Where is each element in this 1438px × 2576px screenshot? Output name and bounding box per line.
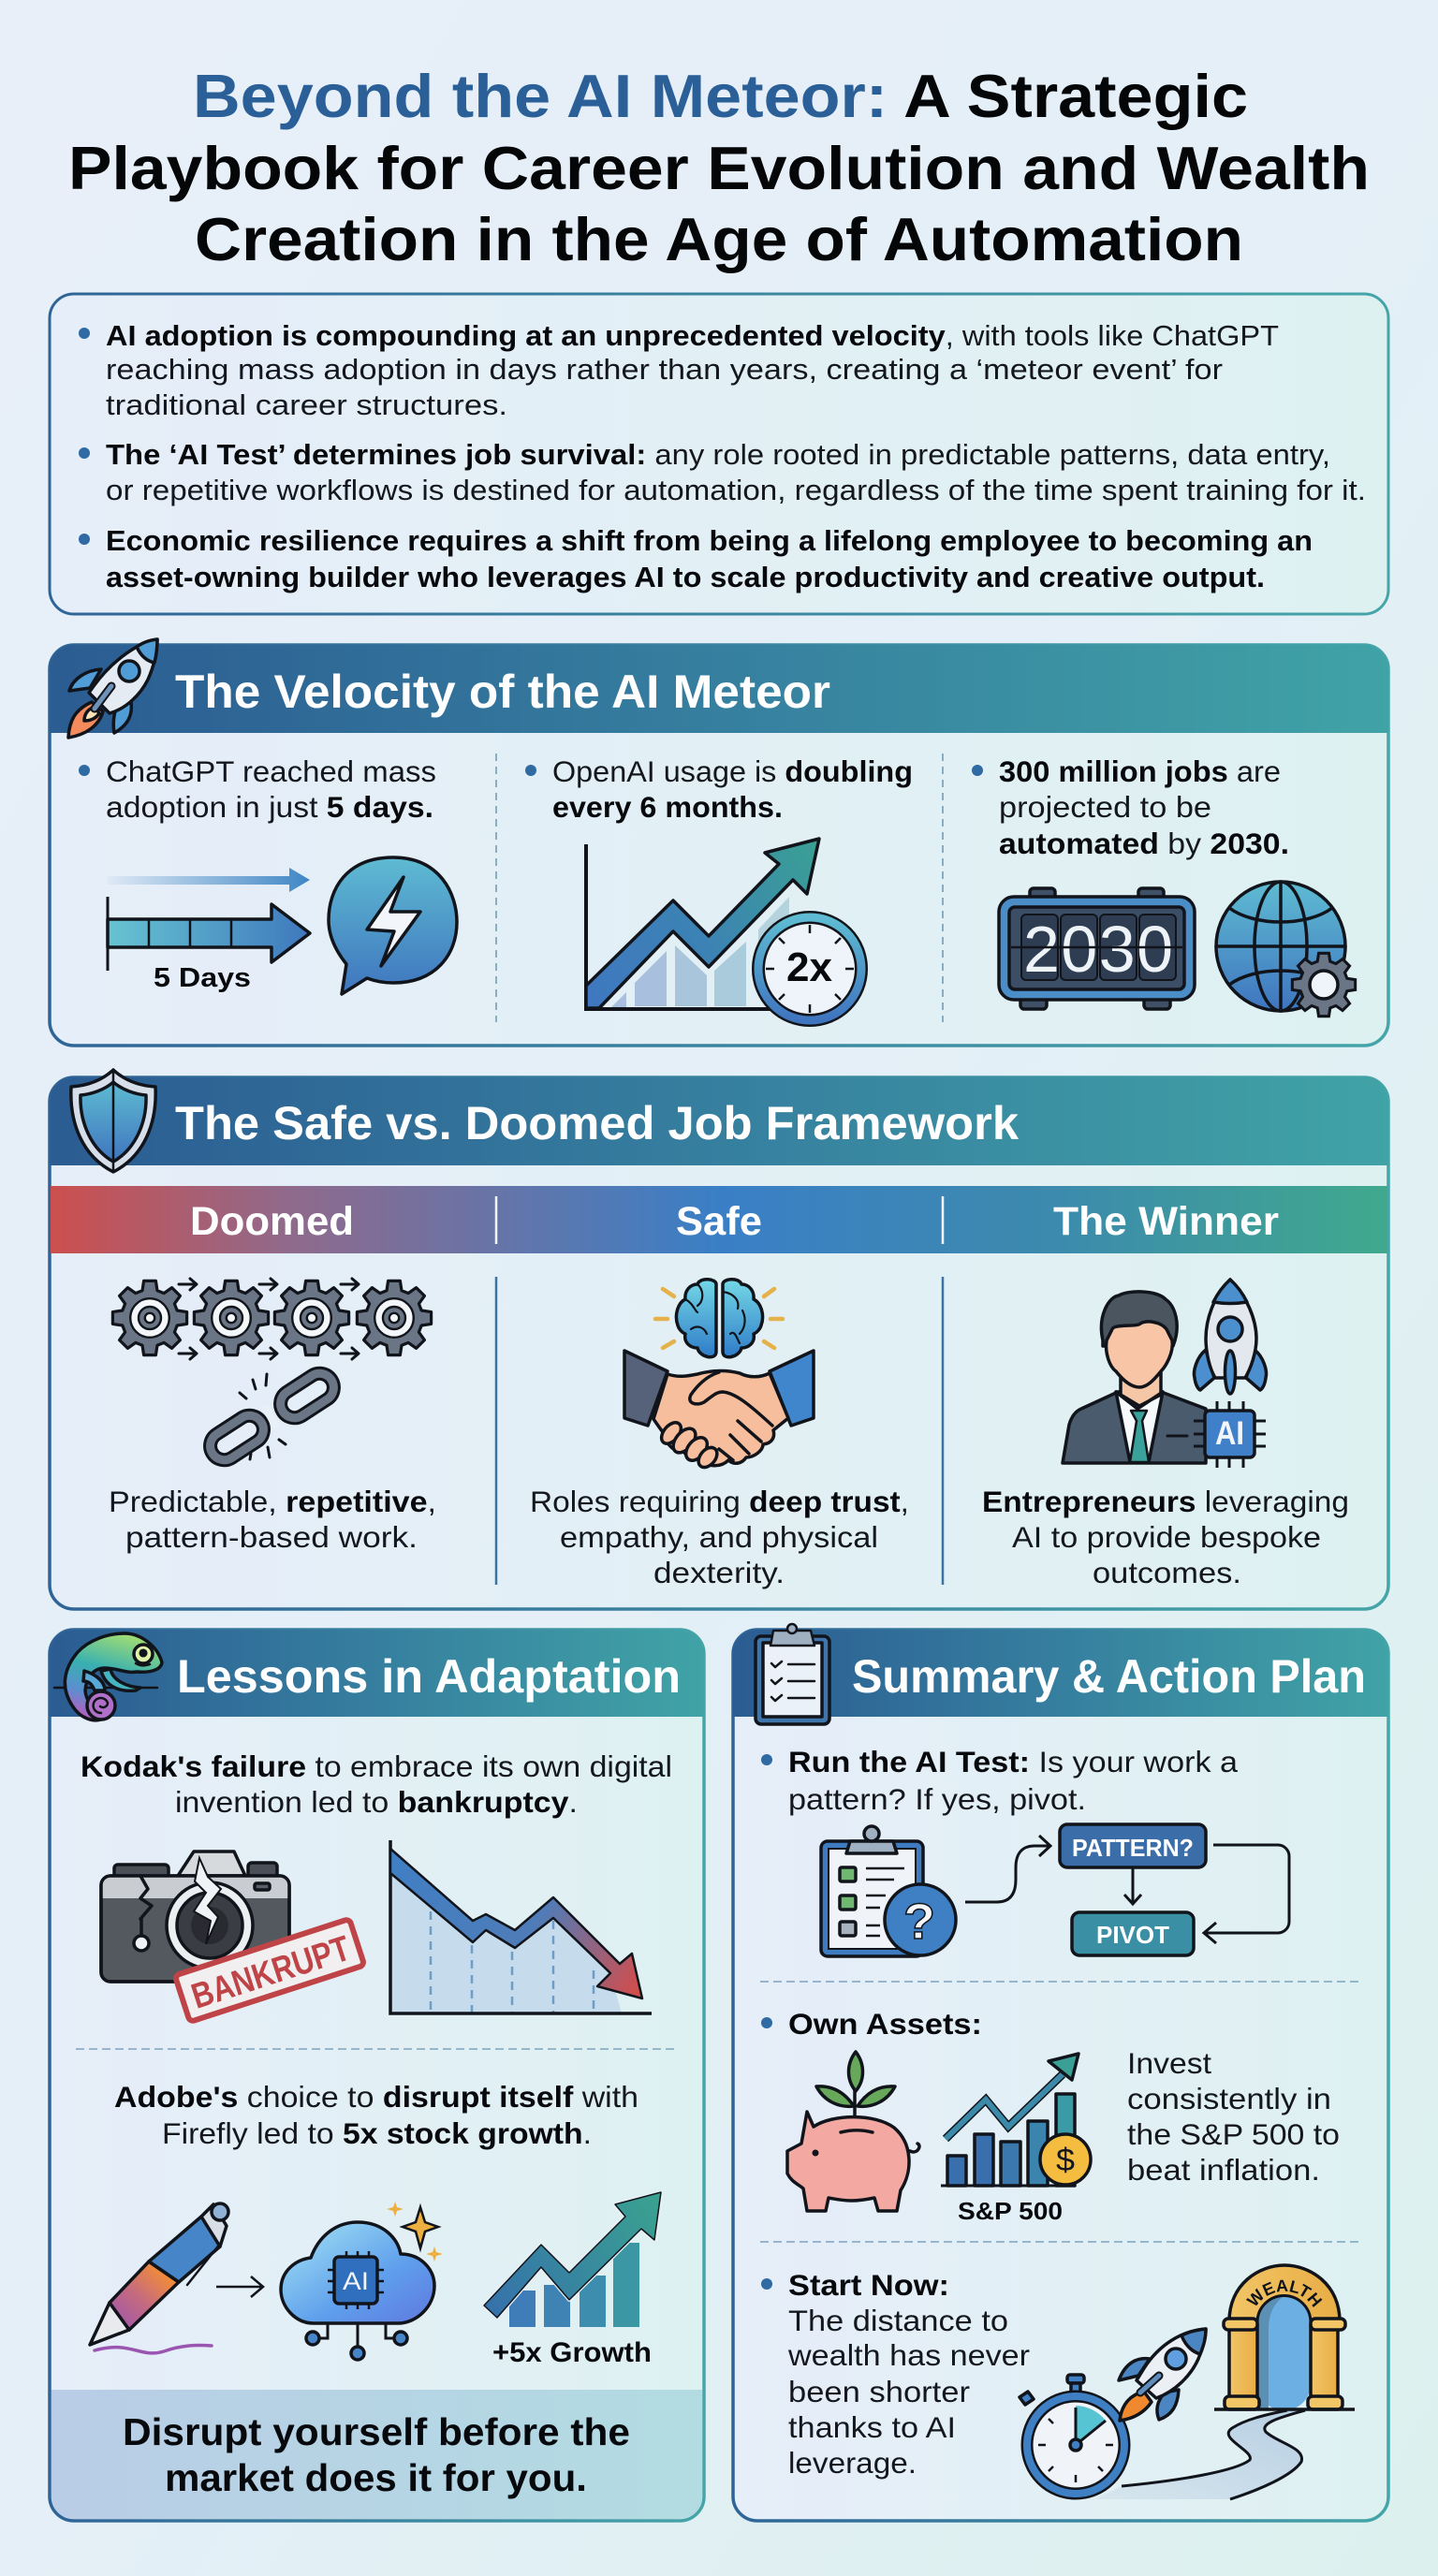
- column: safe: empathy, and physical: [560, 1520, 878, 1554]
- arrow: pattern loop to pivot: [1204, 1845, 1289, 1943]
- step: start now: thanks to AI: [788, 2410, 956, 2444]
- section header: [50, 1077, 1388, 1165]
- text: beat inflation.: [1127, 2153, 1320, 2187]
- heading: The Safe vs. Doomed Job Framework: [175, 1097, 1019, 1149]
- title: Playbook for Career Evolution and Wealth: [68, 134, 1370, 202]
- band: column headers: Safe: [676, 1199, 762, 1244]
- heading: The Velocity of the AI Meteor: [175, 666, 830, 718]
- step: run the AI test: [761, 1745, 1289, 1956]
- text: Predictable, repetitive ,: [109, 1485, 436, 1518]
- icon: broken camera: [101, 1852, 289, 1982]
- box: pattern: PATTERN?: [1072, 1834, 1194, 1862]
- icon: checklist with question: ?: [903, 1894, 935, 1950]
- chart: growth: [484, 2192, 661, 2327]
- column: 300 million jobs: 300 million jobs are: [999, 754, 1281, 788]
- case: Kodak: invention led to bankruptcy .: [175, 1785, 578, 1819]
- icon: AI cloud: [281, 2202, 443, 2360]
- step: start now: wealth has never: [787, 2338, 1030, 2372]
- section header: [50, 1630, 704, 1717]
- icon: stopwatch: [1020, 2375, 1124, 2494]
- icon: entrepreneur: [1063, 1292, 1206, 1463]
- box: pattern: [1060, 1824, 1206, 1867]
- title: Creation in the Age of Automation: [195, 205, 1243, 273]
- text: Roles requiring deep trust ,: [530, 1485, 909, 1518]
- bullet: AI adoption: [79, 319, 1279, 421]
- text: Invest: [1127, 2046, 1211, 2080]
- section header: [733, 1630, 1388, 1717]
- bullet: AI Test: The ‘AI Test’ determines job survival: any role rooted in predictable patterns, data entry,: [106, 438, 1330, 471]
- chart: S&P 500: $: [1056, 2143, 1075, 2178]
- icon: wealth arch: WEALTH: [1245, 2280, 1322, 2307]
- icon: pen: [90, 2203, 228, 2353]
- icon: AI chip: [1194, 1401, 1266, 1468]
- box: pivot: [1072, 1912, 1194, 1955]
- divider: [760, 1981, 1361, 1983]
- text: [1127, 2046, 1340, 2187]
- bullet: AI adoption: traditional career structures.: [106, 388, 507, 421]
- bullet: AI Test: [79, 438, 1366, 506]
- bullet: economic resilience: Economic resilience requires a shift from being a lifelong employee to becoming an: [106, 524, 1313, 557]
- column: doubling: OpenAI usage is doubling: [552, 754, 913, 788]
- column: 5 days: ChatGPT reached mass: [106, 754, 436, 788]
- step: own assets: [761, 2007, 1340, 2225]
- icon: clipboard checklist: [756, 1624, 829, 1724]
- callout: disrupt yourself: Disrupt yourself before the: [123, 2410, 630, 2453]
- icon: flip clock 2030: [999, 888, 1195, 1009]
- title: [68, 62, 1370, 273]
- icon: rocket: [1195, 1280, 1266, 1394]
- column: doomed: pattern-based work.: [125, 1520, 418, 1554]
- chart: falling line: [390, 1840, 652, 2013]
- column: 300 million jobs: projected to be: [999, 790, 1211, 824]
- text: consistently in: [1127, 2082, 1331, 2115]
- label: S&P 500: S&P 500: [958, 2197, 1063, 2225]
- step: start now: been shorter: [788, 2375, 970, 2408]
- column dividers: [496, 1277, 943, 1585]
- arrow: down to pivot: [1124, 1867, 1141, 1904]
- icon: doubling chart with clock: [586, 839, 861, 1020]
- stamp: bankrupt: BANKRUPT: [187, 1929, 355, 2017]
- panel: key takeaways: [50, 294, 1388, 614]
- column: 300 million jobs: automated by 2030.: [999, 827, 1289, 860]
- label: +5x growth: +5x Growth: [492, 2337, 652, 2368]
- step: run the AI test: pattern? If yes, pivot.: [788, 1782, 1086, 1816]
- box: pivot: PIVOT: [1096, 1921, 1169, 1949]
- icon: AI chip: AI: [1215, 1415, 1244, 1452]
- icon: gears chain: [112, 1279, 432, 1359]
- text: Entrepreneurs leveraging: [982, 1485, 1349, 1518]
- band: column headers: The Winner: [1053, 1199, 1279, 1244]
- panel: lessons in adaptation: [50, 1630, 704, 2521]
- icon: broken chain link: [205, 1368, 339, 1465]
- icon: lightning chat bubble: [329, 857, 457, 994]
- panel: summary and action plan: [731, 1623, 1390, 2523]
- column: the winner: outcomes.: [1093, 1556, 1241, 1589]
- callout: disrupt yourself: market does it for you.: [165, 2456, 587, 2499]
- bullet: economic resilience: [79, 524, 1313, 593]
- arrow: to pattern: [965, 1836, 1050, 1902]
- bullet: AI Test: or repetitive workflows is destined for automation, regardless of the time spent training for it.: [106, 474, 1366, 506]
- bullet: AI adoption: reaching mass adoption in days rather than years, creating a ‘meteor event’ for: [106, 353, 1223, 386]
- band: column headers: Doomed: [190, 1199, 354, 1244]
- icon: shield: [71, 1070, 155, 1172]
- icon: winding road: [1095, 2410, 1305, 2499]
- chart: S&P 500: [941, 2054, 1091, 2186]
- icon: globe with gear: [1216, 882, 1356, 1017]
- column: safe: dexterity.: [653, 1556, 785, 1589]
- column: 5 days: adoption in just 5 days.: [106, 790, 433, 824]
- column: the winner: [982, 1280, 1349, 1589]
- icon: rocket: [68, 639, 157, 738]
- text: the S&P 500 to: [1127, 2117, 1340, 2151]
- case: Kodak: [81, 1749, 672, 2022]
- icon: piggy bank with sprout: [787, 2052, 919, 2211]
- icon: flip clock 2030: 2030: [1023, 913, 1173, 986]
- icon: AI cloud: AI: [343, 2267, 369, 2295]
- icon: doubling chart with clock: 2x: [786, 944, 833, 990]
- column: 5 days: [79, 754, 457, 994]
- bullet: AI adoption: AI adoption is compounding at an unprecedented velocity , with tools like ChatGPT: [106, 319, 1279, 352]
- band: column headers: [51, 1186, 1387, 1253]
- icon: chameleon: [54, 1633, 162, 1720]
- column: doomed: [109, 1279, 436, 1554]
- icon: checklist with question: [821, 1826, 956, 1956]
- icon: brain: [655, 1280, 783, 1357]
- title: Beyond the AI Meteor: A Strategic: [193, 62, 1248, 130]
- step: start now: Start Now:: [788, 2268, 949, 2302]
- icon: handshake: [624, 1351, 814, 1471]
- icon: wealth arch: [1214, 2263, 1355, 2411]
- heading: Lessons in Adaptation: [177, 1650, 681, 1703]
- bullet: economic resilience: asset-owning builder who leverages AI to scale productivity and creative output.: [106, 561, 1265, 593]
- road edges: [1122, 2410, 1305, 2499]
- icon: rocket: [1119, 2329, 1206, 2421]
- step: run the AI test: Run the AI Test: Is your work a: [788, 1745, 1239, 1778]
- case: Adobe: Firefly led to 5x stock growth .: [162, 2116, 592, 2150]
- column: doubling: every 6 months.: [552, 790, 783, 824]
- column: doubling: [525, 754, 913, 1020]
- column: 300 million jobs: [972, 754, 1356, 1017]
- section header: [50, 645, 1388, 733]
- heading: Summary & Action Plan: [852, 1650, 1366, 1703]
- step: start now: leverage.: [788, 2446, 917, 2480]
- callout: disrupt yourself: [51, 2390, 702, 2519]
- column dividers: [496, 754, 943, 1022]
- column: safe: [530, 1280, 909, 1589]
- panel: velocity of the AI meteor: [50, 639, 1388, 1046]
- case: Adobe: [90, 2080, 661, 2368]
- divider: [76, 2048, 678, 2050]
- step: own assets: Own Assets:: [788, 2007, 982, 2041]
- arrow: [216, 2276, 263, 2297]
- step: start now: [761, 2263, 1355, 2501]
- divider: [760, 2241, 1361, 2243]
- label: 5 days: 5 Days: [154, 963, 251, 993]
- step: start now: The distance to: [788, 2304, 1008, 2337]
- text: Kodak's failure to embrace its own digital: [81, 1749, 672, 1783]
- column: the winner: AI to provide bespoke: [1012, 1520, 1321, 1554]
- panel: safe vs doomed framework: [50, 1070, 1388, 1609]
- text: Adobe's choice to disrupt itself with: [114, 2080, 638, 2114]
- icon: speed arrows: [107, 868, 310, 971]
